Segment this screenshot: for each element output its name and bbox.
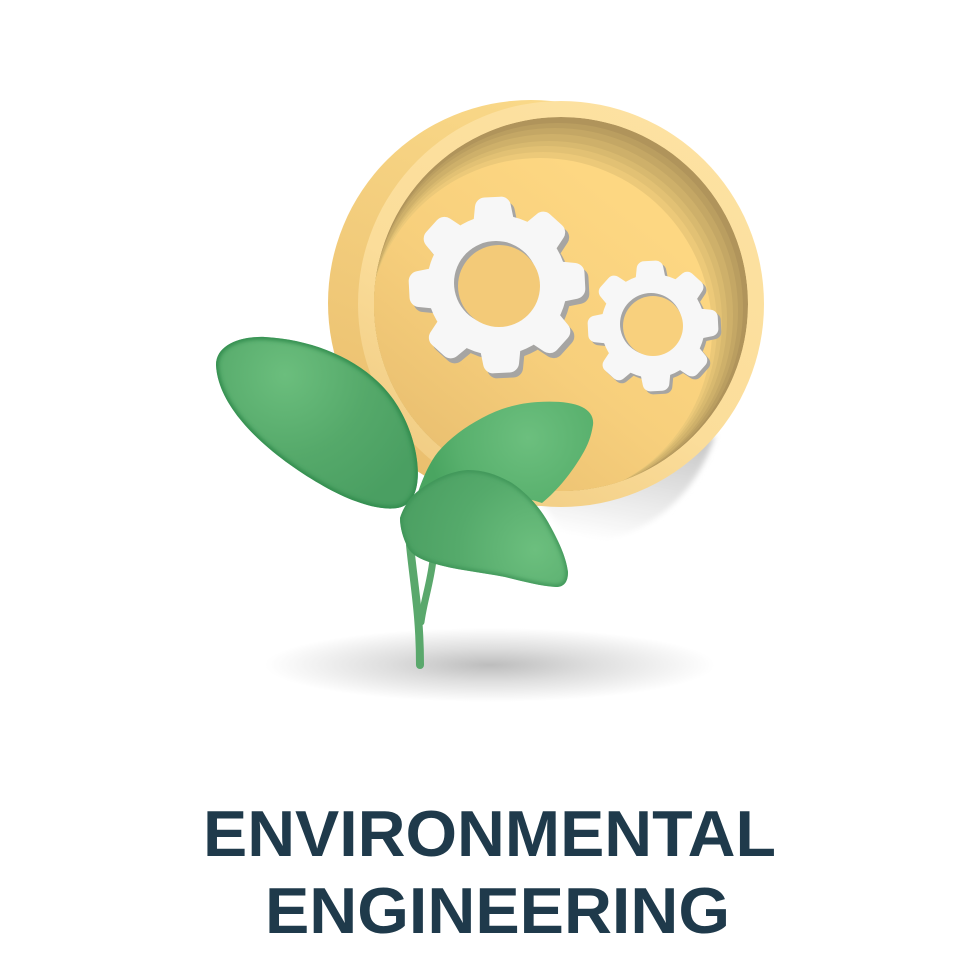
infographic: environmental engineering icon — [207, 100, 774, 934]
gear drop shadow — [595, 268, 717, 390]
gear hole — [620, 293, 682, 355]
gear drop shadow — [419, 208, 583, 372]
right leaf — [418, 402, 593, 503]
left leaf — [216, 337, 418, 509]
stems — [410, 545, 433, 665]
icon: small gear — [592, 265, 717, 390]
title line 1: ENVIRONMENTAL — [203, 797, 776, 870]
gear hole — [454, 241, 538, 325]
title — [203, 797, 776, 947]
icon: plant — [216, 337, 593, 665]
coin shadow — [540, 435, 715, 542]
coin — [328, 100, 764, 507]
gear body — [592, 265, 714, 387]
icon: large gear — [415, 203, 583, 372]
coin back edge — [328, 100, 734, 506]
gear body — [415, 203, 579, 367]
coin rim — [358, 101, 764, 507]
ground shadow — [265, 628, 715, 702]
coin recessed face — [368, 117, 748, 502]
front leaf — [400, 470, 568, 587]
title line 2: ENGINEERING — [265, 874, 730, 947]
